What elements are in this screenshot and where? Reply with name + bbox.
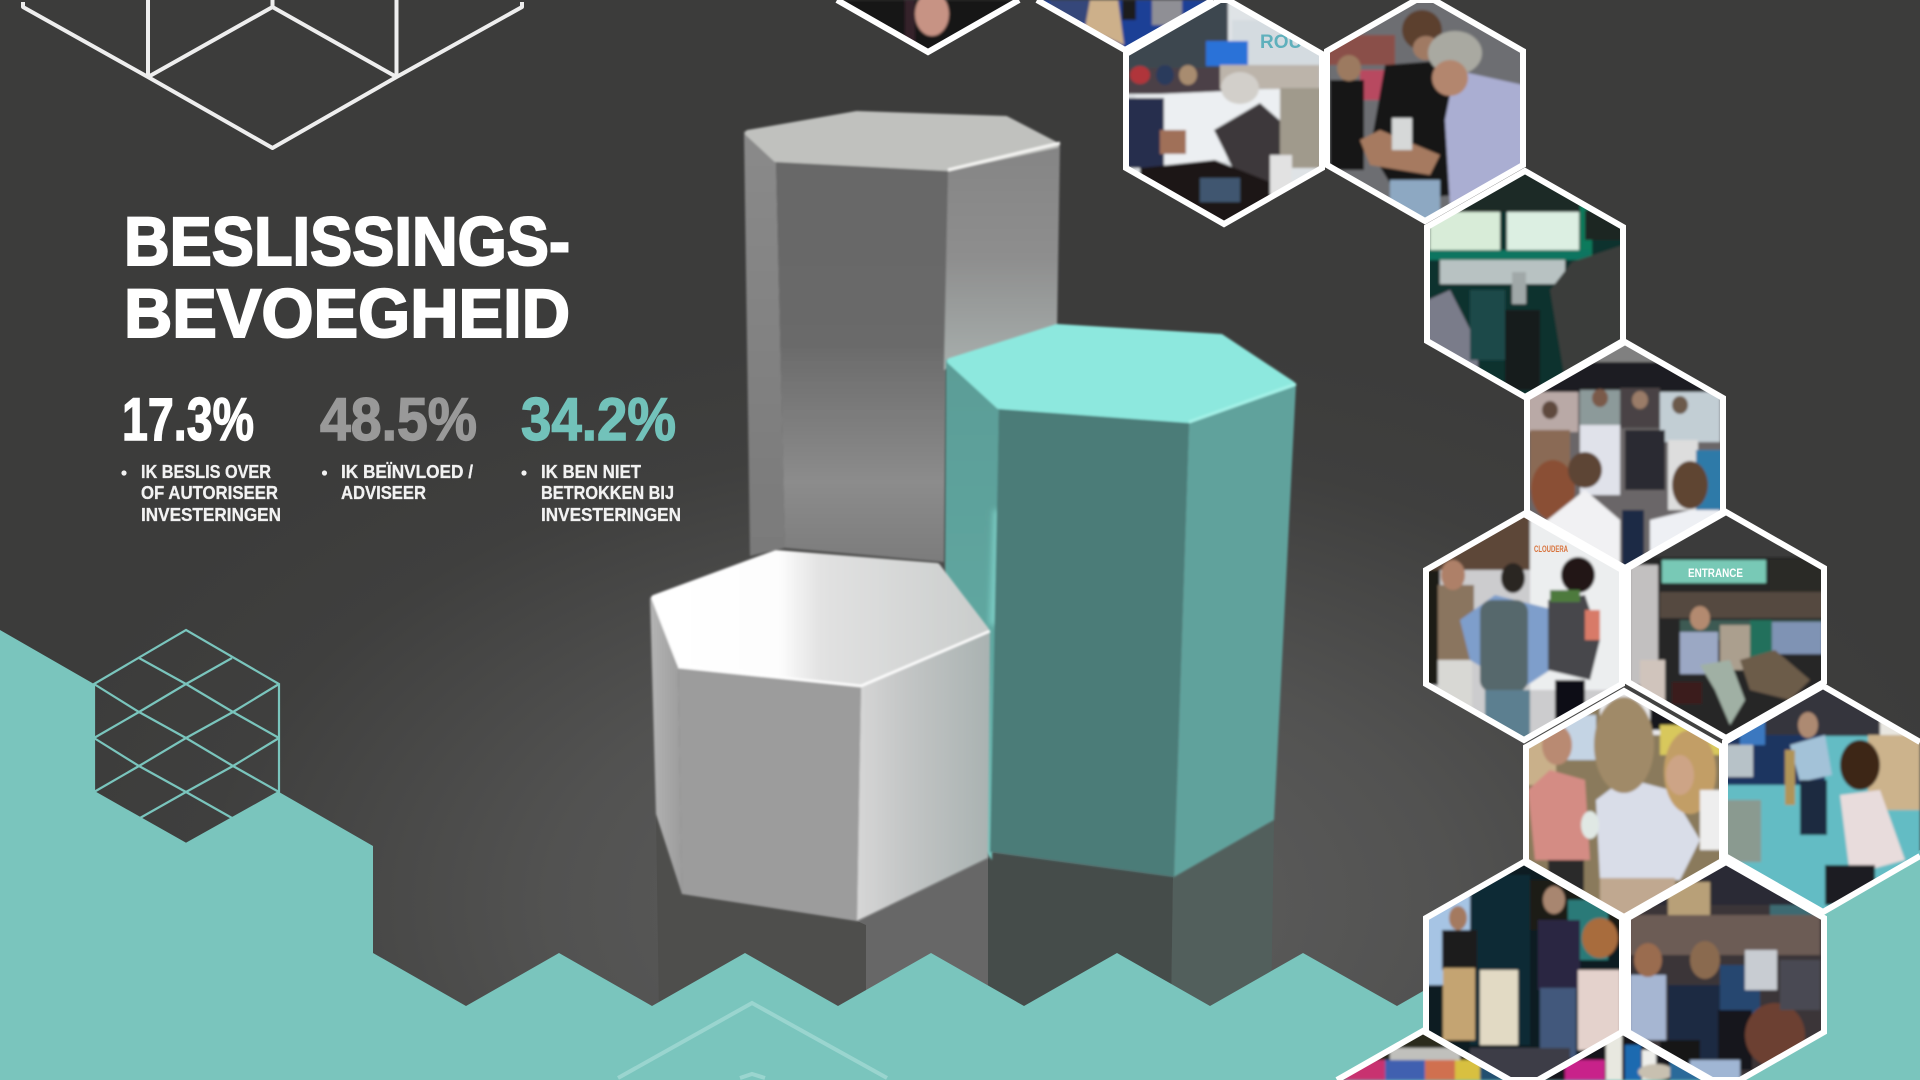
photo hexagon: two men looking at tablet [1325, 0, 1525, 224]
photo hexagon: round table meeting: ROU [1260, 32, 1302, 53]
photo hexagon: Cloudera booth conversation [1425, 514, 1625, 740]
stat: 48.5% [320, 386, 477, 503]
stat: 17.3%: INVESTERINGEN [141, 505, 281, 525]
stat: 34.2%: INVESTERINGEN [541, 505, 681, 525]
icon: faint hexagon outline in teal ground [618, 1003, 887, 1078]
photo hexagon: speaker on blue carpet [1725, 686, 1920, 914]
3D chart: hexagonal columns [650, 114, 1296, 921]
stat: 34.2%: 34.2% [521, 386, 676, 453]
photo hexagon: bottom, colourful mural [1337, 1031, 1509, 1080]
photo hexagon: round table meeting [1124, 0, 1325, 226]
stat: 48.5%: ADVISEER [341, 483, 426, 503]
photo hexagon: crowd of visitors [1525, 340, 1725, 570]
column: teal 34.2% [944, 327, 1296, 877]
stat: 48.5%: 48.5% [320, 386, 477, 453]
photo hexagon: two presenters on stage [1425, 862, 1623, 1080]
title [124, 203, 570, 352]
stat: 17.3%: OF AUTORISEER [141, 483, 278, 503]
icon: teal hexagon lattice [94, 630, 279, 844]
title: BESLISSINGS- [124, 203, 570, 280]
stat: 17.3%: 17.3% [122, 386, 254, 453]
photo hexagon: entrance seated audience: ENTRANCE [1688, 566, 1743, 580]
photo hexagon: top, black shirt and arm [836, 0, 1020, 56]
stat: 48.5%: IK BEÏNVLOED / [341, 462, 473, 482]
icon: white hexagon grid top left [23, 0, 522, 148]
column: grey 48.5% [744, 114, 1060, 562]
stat: 17.3%: IK BESLIS OVER [141, 462, 271, 482]
photo hexagon: Cloudera booth conversation: CLOUDERA [1534, 544, 1568, 554]
stat: 34.2% [521, 386, 681, 525]
photo collage of hexagons [830, 0, 1920, 1080]
floor reflections of the columns [656, 814, 1274, 1080]
stat: 17.3% [121, 386, 281, 525]
photo hexagon: stage with two screens [1425, 170, 1625, 400]
photo hexagon: three people talking [1525, 690, 1725, 918]
column: white 17.3% [650, 553, 990, 921]
photo hexagon: bottom, booth with blue panels [1539, 1032, 1707, 1080]
stat: 34.2%: IK BEN NIET [541, 462, 641, 482]
photo hexagon: entrance seated audience [1628, 512, 1826, 740]
photo hexagon: top, blue crowd and tote bag [1036, 0, 1214, 52]
title: BEVOEGHEID [124, 275, 570, 352]
photo hexagon: seated audience at stage [1628, 862, 1826, 1080]
stat: 34.2%: BETROKKEN BIJ [541, 483, 674, 503]
teal zigzag ground shape [0, 630, 1920, 1080]
